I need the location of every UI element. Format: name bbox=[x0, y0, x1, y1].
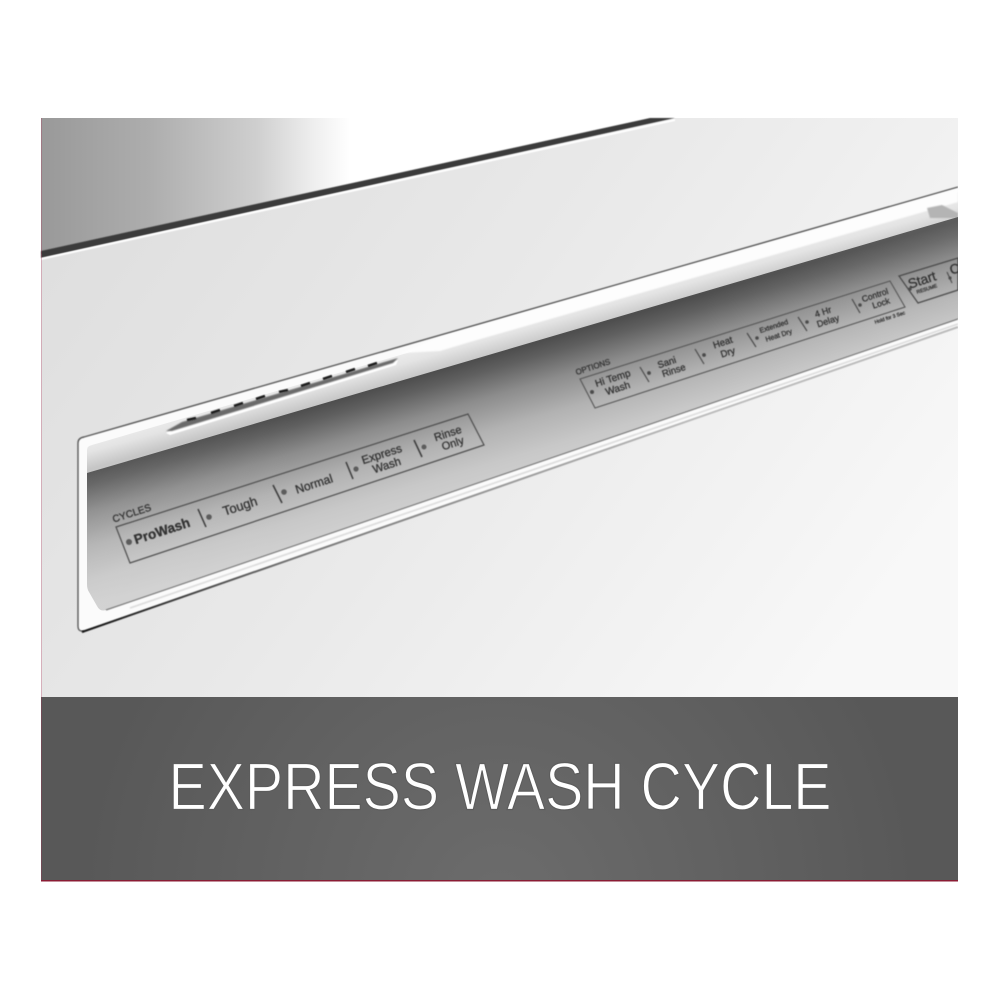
options box outline bbox=[580, 281, 905, 408]
dividers bbox=[640, 299, 860, 382]
option labels: Lock bbox=[871, 295, 892, 311]
option labels: Delay bbox=[816, 313, 841, 329]
start and cancel buttons: Cancel bbox=[948, 250, 992, 278]
start and cancel buttons bbox=[899, 250, 992, 303]
cycle labels: Tough bbox=[221, 493, 259, 519]
right margin mask bbox=[958, 118, 1000, 888]
title band bbox=[41, 697, 958, 881]
option labels: Dry bbox=[719, 345, 737, 361]
title text: EXPRESS WASH CYCLE bbox=[168, 750, 832, 824]
option labels: Hi Temp bbox=[594, 368, 632, 390]
option labels: Heat bbox=[712, 335, 735, 351]
option labels: Sani bbox=[656, 355, 678, 371]
option labels bbox=[594, 286, 906, 398]
bottom edge line bbox=[41, 880, 958, 882]
cycle labels bbox=[132, 424, 466, 547]
start and cancel buttons: Start bbox=[906, 268, 938, 292]
dividers bbox=[198, 440, 422, 527]
option labels: Control bbox=[860, 286, 890, 304]
button outline bbox=[899, 258, 958, 303]
option labels: Wash bbox=[604, 380, 632, 398]
cycle labels: Rinse bbox=[433, 424, 463, 444]
start and cancel buttons: RESUME bbox=[916, 283, 939, 296]
outer lip bbox=[78, 187, 958, 631]
option labels: Heat Dry bbox=[765, 328, 794, 344]
option labels: 4 Hr bbox=[813, 305, 833, 319]
cycles heading: CYCLES bbox=[111, 502, 153, 525]
door panel background bbox=[41, 118, 958, 698]
cycle labels: Only bbox=[440, 435, 466, 453]
indicator dots bbox=[126, 444, 426, 545]
cycles control group bbox=[111, 414, 484, 563]
cycle labels: ProWash bbox=[132, 515, 192, 547]
cycle labels: Express bbox=[360, 443, 404, 467]
option labels: Extended bbox=[759, 319, 789, 335]
option labels: Hold for 3 Sec bbox=[874, 310, 906, 326]
vent slot bbox=[166, 358, 398, 435]
stainless steel top of the dishwasher bbox=[41, 118, 675, 260]
upper ledge bbox=[87, 192, 958, 474]
left edge line bbox=[41, 118, 42, 881]
option labels: Rinse bbox=[661, 362, 687, 380]
cycle labels: Wash bbox=[371, 456, 403, 476]
control panel recess bbox=[78, 187, 958, 632]
options heading: OPTIONS bbox=[574, 357, 612, 377]
cycles box outline bbox=[116, 414, 484, 563]
dark gap line bbox=[41, 118, 675, 258]
cycle labels: Normal bbox=[293, 471, 335, 497]
recessed shaded face bbox=[87, 217, 958, 610]
indicator dots bbox=[590, 303, 862, 394]
options control group bbox=[574, 281, 906, 408]
